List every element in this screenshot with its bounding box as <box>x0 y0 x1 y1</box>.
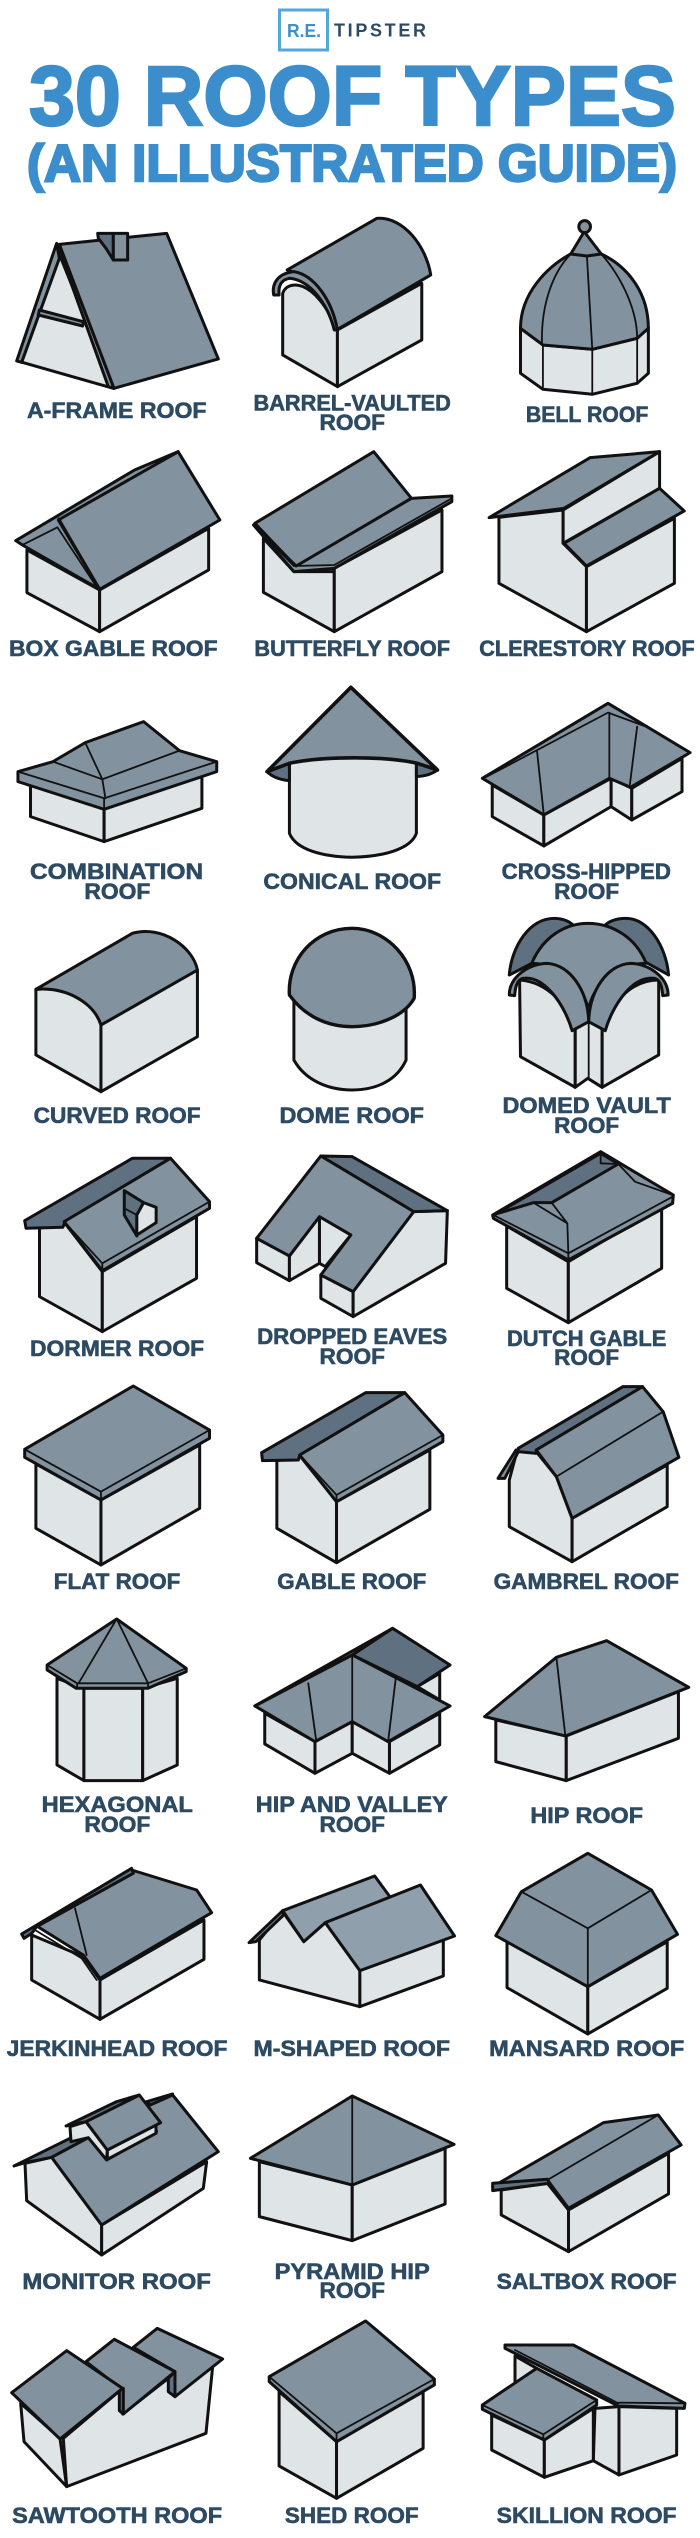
label: hexagonal roof <box>42 1792 193 1837</box>
icon: butterfly roof <box>254 452 452 632</box>
icon: hip and valley roof <box>255 1628 450 1773</box>
label: cross-hipped roof <box>502 859 671 904</box>
label: combination roof: ROOF <box>84 879 150 904</box>
label: pyramid hip roof: ROOF <box>320 2278 385 2303</box>
label: jerkinhead roof: JERKINHEAD ROOF <box>7 2036 228 2061</box>
label: conical roof: CONICAL ROOF <box>263 869 441 894</box>
label: a-frame roof: A-FRAME ROOF <box>27 398 207 423</box>
label: dutch gable roof: ROOF <box>554 1345 619 1370</box>
label: barrel-vaulted roof: BARREL-VAULTED <box>254 390 451 416</box>
icon: sawtooth roof <box>12 2328 223 2487</box>
label: hip and valley roof: ROOF <box>320 1812 385 1837</box>
logo <box>280 10 426 50</box>
label: domed vault roof: DOMED VAULT <box>502 1093 671 1118</box>
label: hexagonal roof: ROOF <box>84 1812 150 1837</box>
label: dome roof: DOME ROOF <box>280 1103 424 1128</box>
label: dropped eaves roof: ROOF <box>320 1344 385 1369</box>
icon: flat roof <box>25 1386 210 1565</box>
label: dropped eaves roof <box>257 1324 447 1369</box>
label: dormer roof: DORMER ROOF <box>30 1336 204 1361</box>
label: butterfly roof: BUTTERFLY ROOF <box>254 636 450 661</box>
label: gable roof: GABLE ROOF <box>277 1569 426 1594</box>
icon: cross-hipped roof <box>482 703 690 846</box>
logo: R.E. <box>287 21 321 41</box>
label: barrel-vaulted roof <box>254 390 451 435</box>
label: gambrel roof: GAMBREL ROOF <box>494 1569 679 1594</box>
icon: shed roof <box>269 2321 434 2498</box>
label: clerestory roof: CLERESTORY ROOF <box>479 636 695 661</box>
label: domed vault roof <box>502 1093 671 1138</box>
label: hip and valley roof: HIP AND VALLEY <box>256 1792 448 1817</box>
label: m-shaped roof: M-SHAPED ROOF <box>254 2036 450 2061</box>
label: pyramid hip roof <box>275 2259 430 2303</box>
label: hexagonal roof: HEXAGONAL <box>42 1792 193 1817</box>
label: dutch gable roof: DUTCH GABLE <box>507 1326 666 1351</box>
label: bell roof: BELL ROOF <box>526 402 648 427</box>
icon: dome roof <box>289 928 414 1090</box>
label: skillion roof: SKILLION ROOF <box>497 2503 677 2528</box>
label: box gable roof: BOX GABLE ROOF <box>9 636 218 661</box>
icon: conical roof <box>267 687 437 857</box>
label: hip roof: HIP ROOF <box>530 1803 643 1828</box>
icon: jerkinhead roof <box>22 1868 212 2019</box>
label: saltbox roof: SALTBOX ROOF <box>497 2269 677 2294</box>
icon: monitor roof <box>14 2094 218 2255</box>
icon: box gable roof <box>16 452 220 632</box>
icon: barrel-vaulted roof <box>273 218 431 387</box>
label: pyramid hip roof: PYRAMID HIP <box>275 2259 430 2284</box>
icon: hexagonal roof <box>47 1619 186 1781</box>
icon: pyramid hip roof <box>250 2096 454 2241</box>
label: domed vault roof: ROOF <box>554 1113 619 1138</box>
label: flat roof: FLAT ROOF <box>54 1569 180 1594</box>
label: hip and valley roof <box>256 1792 448 1837</box>
title: 30 ROOF TYPES <box>29 49 676 143</box>
icon: hip roof <box>485 1641 689 1781</box>
label: mansard roof: MANSARD ROOF <box>489 2036 684 2061</box>
label: shed roof: SHED ROOF <box>285 2503 419 2528</box>
logo: TIPSTER <box>334 20 426 40</box>
icon: a-frame roof <box>17 233 218 388</box>
icon: bell roof <box>520 221 648 394</box>
icon: saltbox roof <box>493 2115 681 2252</box>
label: sawtooth roof: SAWTOOTH ROOF <box>12 2503 222 2528</box>
icon: m-shaped roof <box>249 1876 455 2007</box>
label: combination roof: COMBINATION <box>30 859 203 884</box>
label: curved roof: CURVED ROOF <box>34 1103 201 1128</box>
icon: dutch gable roof <box>493 1152 673 1323</box>
label: barrel-vaulted roof: ROOF <box>320 410 385 435</box>
icon: dropped eaves roof <box>257 1156 447 1317</box>
icon: curved roof <box>36 932 197 1092</box>
label: monitor roof: MONITOR ROOF <box>22 2269 211 2294</box>
icon: skillion roof <box>482 2345 685 2477</box>
icon: mansard roof <box>496 1853 678 2034</box>
icon: combination roof <box>18 722 217 842</box>
icon: dormer roof <box>25 1158 210 1332</box>
label: dutch gable roof <box>507 1326 666 1370</box>
label: dropped eaves roof: DROPPED EAVES <box>257 1324 447 1349</box>
label: cross-hipped roof: ROOF <box>554 879 619 904</box>
label: cross-hipped roof: CROSS-HIPPED <box>502 859 671 884</box>
label: combination roof <box>30 859 203 904</box>
subtitle: (AN ILLUSTRATED GUIDE) <box>27 135 677 193</box>
icon: domed vault roof <box>509 918 669 1087</box>
icon: gambrel roof <box>498 1387 679 1562</box>
icon: clerestory roof <box>489 452 684 632</box>
icon: gable roof <box>262 1393 443 1563</box>
